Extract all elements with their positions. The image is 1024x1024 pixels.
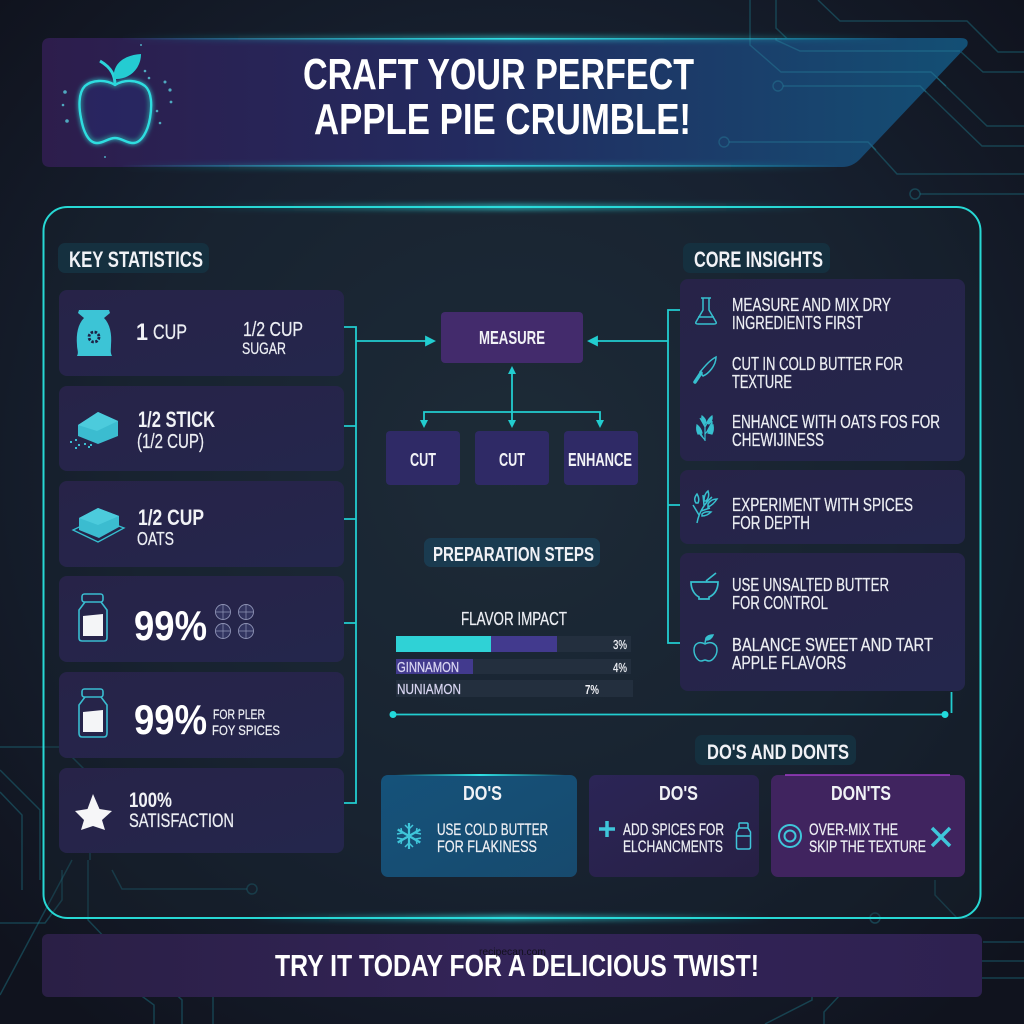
stat: 100% satisfaction: 100% — [129, 789, 172, 812]
insight: experiment — [732, 495, 913, 533]
step: measure: MEASURE — [479, 328, 545, 348]
text: USE COLD BUTTER — [437, 821, 548, 839]
stat: half cup oats: 1/2 CUP — [138, 505, 204, 530]
heading: DO'S — [659, 783, 698, 805]
title banner — [42, 37, 968, 168]
stat card: satisfaction — [59, 768, 344, 853]
insight: unsalted butter: USE UNSALTED BUTTER — [732, 575, 889, 595]
icon: sack — [77, 310, 112, 356]
insight: enhance with oats — [732, 412, 940, 450]
icon: cross — [932, 828, 950, 846]
icon: butter block — [70, 412, 118, 449]
text — [809, 821, 926, 856]
stat: sugar — [242, 319, 303, 358]
timeline line — [390, 692, 952, 718]
stat: half stick: (1/2 CUP) — [137, 431, 204, 453]
icon: small apple — [694, 635, 717, 661]
text: OVER-MIX THE — [809, 821, 898, 839]
panel: do's dark — [589, 775, 759, 877]
stat: sugar: SUGAR — [242, 339, 286, 358]
panel: core insights group 2 — [680, 470, 965, 544]
icon: oats block — [73, 508, 124, 542]
bar row 3 — [396, 680, 633, 698]
step: enhance: ENHANCE — [568, 450, 632, 470]
heading: key statistics — [58, 243, 209, 273]
footer text: TRY IT TODAY FOR A DELICIOUS TWIST! — [275, 948, 759, 983]
stat: 1 cup — [136, 319, 187, 346]
insight: balance flavors: BALANCE SWEET AND TART — [732, 635, 933, 655]
icon: globes — [216, 604, 254, 638]
stat: half cup oats — [137, 505, 204, 549]
bar row 2: 4% — [613, 660, 627, 675]
bar row 1 — [396, 636, 631, 652]
icon: apple — [62, 44, 172, 158]
connector: insights to measure — [589, 310, 680, 643]
heading: DON'TS — [831, 783, 891, 805]
heading: dos and donts — [695, 735, 856, 765]
step: cut — [386, 431, 460, 485]
bar row 2: GINNAMON — [397, 659, 459, 676]
text: ADD SPICES FOR — [623, 821, 724, 839]
stat: half cup oats: OATS — [137, 529, 174, 549]
title text: CRAFT YOUR PERFECT — [303, 50, 694, 99]
icon: sprig — [697, 416, 713, 441]
stat: sugar: 1/2 CUP — [243, 319, 303, 341]
icon: snowflake — [397, 823, 421, 849]
text: ELCHANCMENTS — [623, 838, 723, 856]
insight: cut in butter: TEXTURE — [732, 372, 792, 392]
step: cut: CUT — [499, 450, 525, 470]
stat: half stick — [137, 407, 215, 453]
arrows: measure to sub-steps — [420, 366, 604, 428]
heading: key statistics: KEY STATISTICS — [69, 247, 203, 272]
insight: unsalted butter — [732, 575, 889, 613]
heading: preparation steps: PREPARATION STEPS — [433, 544, 594, 566]
bar row 2 — [396, 659, 631, 676]
title text — [303, 50, 694, 144]
heading: dos and donts: DO'S AND DONTS — [707, 741, 849, 764]
heading: preparation steps — [424, 538, 600, 567]
insight: experiment: EXPERIMENT WITH SPICES — [732, 495, 913, 515]
stat: 1 cup: 1 — [136, 319, 148, 346]
stat card: 99 percent spices — [59, 672, 344, 758]
connector: statistics to measure — [344, 327, 434, 803]
insight: unsalted butter: FOR CONTROL — [732, 593, 828, 613]
text: SKIP THE TEXTURE — [809, 838, 926, 856]
watermark: recipecan.com — [479, 947, 546, 958]
insight: measure and mix: INGREDIENTS FIRST — [732, 313, 863, 333]
stat: 100% satisfaction: SATISFACTION — [129, 811, 234, 832]
icon: bottle — [736, 823, 750, 849]
stat card: flour and sugar — [59, 290, 344, 376]
title text: APPLE PIE CRUMBLE! — [314, 95, 691, 144]
insight: enhance with oats: CHEWIJINESS — [732, 430, 824, 450]
heading: DO'S — [463, 783, 502, 805]
icon: flask — [696, 298, 716, 324]
insight: balance flavors — [732, 635, 933, 673]
panel: do's blue — [381, 774, 577, 877]
icon: jar — [79, 689, 107, 737]
panel: don'ts — [771, 774, 965, 877]
stat: 99%: 99% — [134, 696, 207, 743]
icon: jar — [79, 594, 107, 641]
icon: mortar and bowl — [691, 573, 718, 599]
bar row 3: 7% — [585, 682, 599, 697]
stat: half stick: 1/2 STICK — [138, 407, 215, 432]
heading: core insights — [683, 243, 830, 273]
bar row 3: NUNIAMON — [397, 681, 461, 698]
step: cut: CUT — [410, 450, 436, 470]
stat: 100% satisfaction — [129, 789, 234, 832]
insight: cut in butter — [732, 354, 903, 392]
step: cut — [475, 431, 549, 485]
main frame — [44, 205, 980, 920]
text: FOR FLAKINESS — [437, 838, 537, 856]
text — [437, 821, 548, 856]
text — [623, 821, 724, 856]
stat label: spices: FOY SPICES — [212, 722, 280, 738]
stat: 99%: 99% — [134, 602, 207, 649]
stat card: oats — [59, 481, 344, 567]
stat label: spices: FOR PLER — [213, 706, 265, 722]
insight: measure and mix: MEASURE AND MIX DRY — [732, 295, 891, 315]
stat label: spices — [212, 706, 280, 738]
stat card: butter — [59, 386, 344, 471]
bar chart: flavor impact — [396, 609, 633, 698]
panel: core insights group 3 — [680, 553, 965, 691]
insight: measure and mix — [732, 295, 891, 333]
chart title: FLAVOR IMPACT — [461, 609, 567, 629]
step: measure — [441, 312, 583, 363]
insight: experiment: FOR DEPTH — [732, 513, 810, 533]
icon: star — [75, 794, 112, 830]
heading: core insights: CORE INSIGHTS — [694, 247, 823, 272]
insight: enhance with oats: ENHANCE WITH OATS FOS FOR — [732, 412, 940, 432]
stat: 1 cup: CUP — [153, 321, 187, 344]
panel: core insights group 1 — [680, 279, 965, 461]
insight: cut in butter: CUT IN COLD BUTTER FOR — [732, 354, 903, 374]
footer banner — [42, 934, 982, 997]
icon: plus — [599, 821, 615, 837]
insight: balance flavors: APPLE FLAVORS — [732, 653, 846, 673]
step: enhance — [564, 431, 638, 485]
icon: knife — [695, 357, 716, 382]
bar row 1: 3% — [613, 637, 627, 652]
stat card: 99 percent with globes — [59, 576, 344, 662]
icon: target — [779, 825, 801, 847]
icon: herb — [693, 491, 717, 523]
